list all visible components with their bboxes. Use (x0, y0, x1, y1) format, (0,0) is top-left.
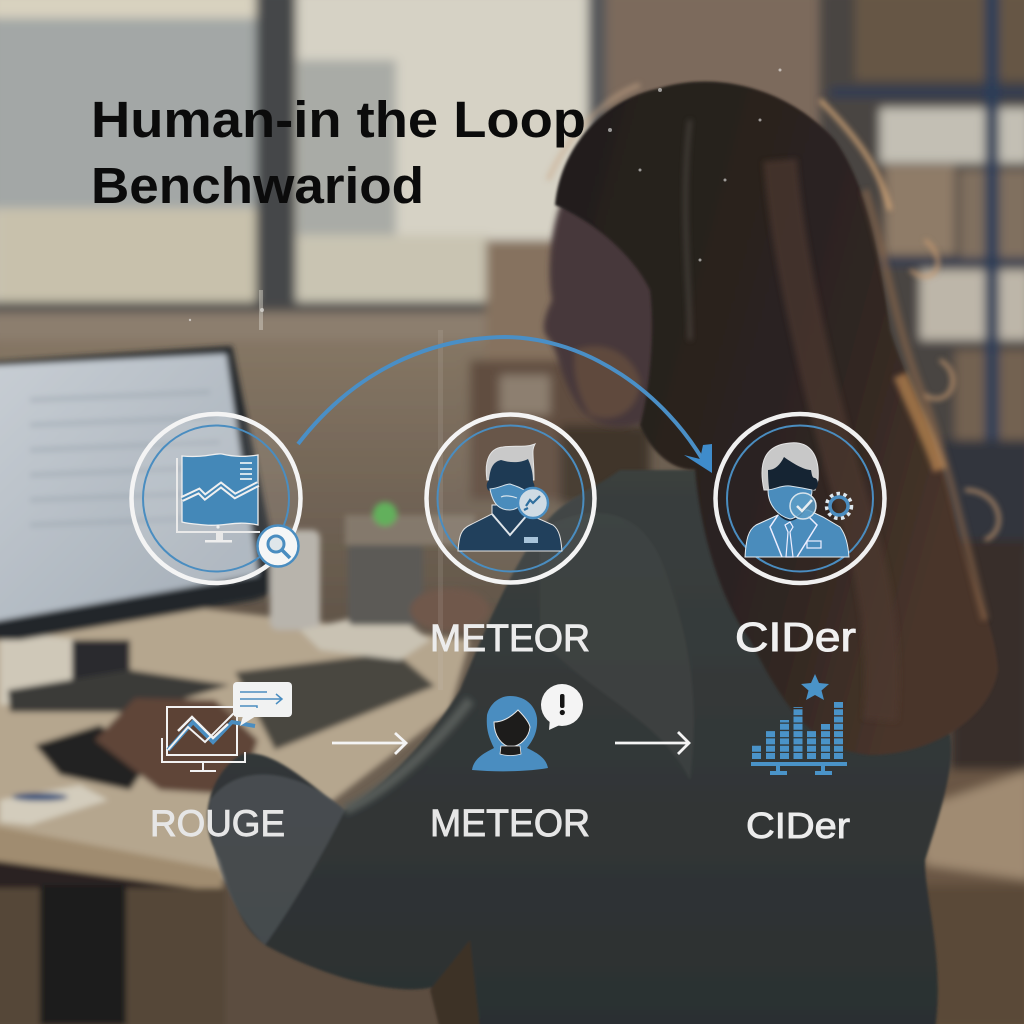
icon: woman with alert bubble (472, 684, 583, 771)
icon: alert bubble (541, 684, 583, 730)
woman: hair (555, 81, 998, 755)
curved arrow from first to third circle (298, 337, 712, 473)
woman: jacket (207, 470, 951, 1024)
arrow: METEOR to CIDer (615, 732, 689, 754)
icon: check badge (790, 493, 816, 519)
hair highlights (548, 85, 999, 720)
label: CIDer lower: CIDer (746, 805, 850, 846)
icon: line chart monitor with callout (162, 682, 292, 771)
label: METEOR lower: METEOR (430, 803, 590, 845)
title: Benchwariod (91, 157, 424, 214)
icon circle: masked professional with gear (716, 414, 884, 583)
icon: check badge (518, 488, 548, 518)
icon: magnifier badge (258, 526, 298, 566)
label: ROUGE: ROUGE (150, 803, 285, 844)
shelves on the right (820, 0, 1024, 1024)
arrow: ROUGE to METEOR (332, 733, 406, 754)
label: CIDer upper: CIDer (735, 614, 856, 660)
glass specks (189, 68, 782, 702)
icon: gear (826, 494, 852, 518)
icon circle: document monitor with magnifier (132, 414, 300, 583)
woman: face (544, 200, 680, 427)
title: Human-in the Loop (91, 91, 586, 148)
icon circle: masked clinician with check badge (426, 414, 594, 582)
icon: bar chart with star (751, 674, 847, 775)
monitor, desk and keyboard (0, 346, 490, 1024)
title (91, 91, 586, 214)
label: METEOR upper: METEOR (430, 618, 590, 660)
